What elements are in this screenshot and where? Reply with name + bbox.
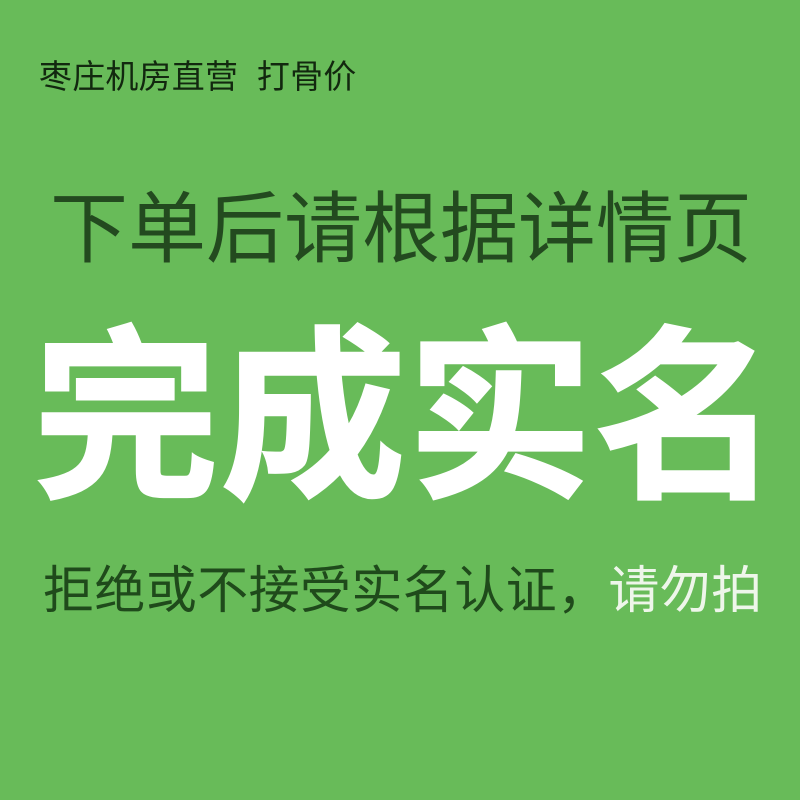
footer warning text: 拒绝或不接受实名认证，请勿拍 xyxy=(43,562,763,619)
subtitle: instruction: 下单后请根据详情页 xyxy=(50,185,752,273)
main title: complete real-name: 完成实名 xyxy=(33,316,781,523)
heading: shop name: 枣庄机房直营 打骨价 xyxy=(39,58,357,95)
